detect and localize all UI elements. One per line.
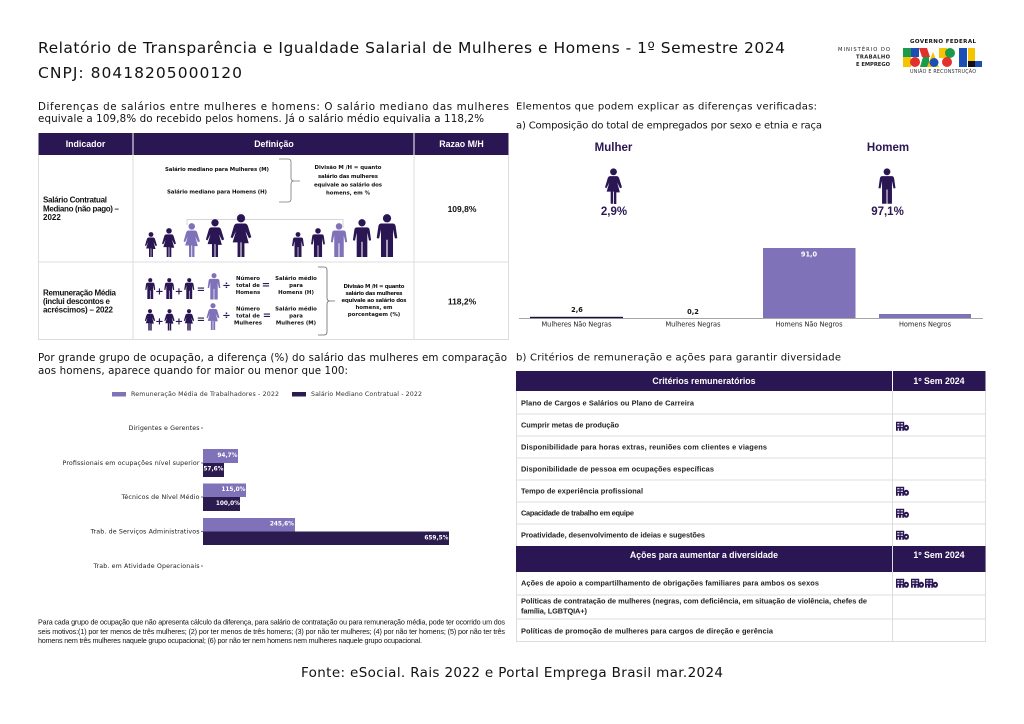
- row label: remuneração média: (inclui descontos e: [43, 297, 111, 306]
- definition: division M/H: [318, 267, 406, 335]
- definition: median salary: Salário mediano para Homens (H): [167, 188, 267, 196]
- panel: man share: [867, 142, 909, 218]
- definition: median salary: salário das mulheres: [318, 173, 378, 180]
- bar chart: occupation: 659,5%: [424, 536, 449, 542]
- footnote: Para cada grupo de ocupação que não apresenta cálculo da diferença, para salário de contratação ou para remuneração média, pode ter ocorrido um dos: [38, 618, 505, 626]
- header: critérios: 1º Sem 2024: [913, 376, 965, 386]
- definition: average pay men: Homens (H): [278, 290, 314, 296]
- definition: division M/H: porcentagem (%): [348, 312, 400, 318]
- bar chart: composition: [519, 248, 983, 328]
- title: [38, 39, 785, 82]
- definition: average pay women: Mulheres: [234, 320, 262, 326]
- text block: salary differences: Diferenças de salários entre mulheres e homens: O salário mediano das mulheres: [38, 101, 509, 113]
- definition: average pay women: =: [263, 310, 271, 322]
- logo: governo federal brasil: UNIÃO E RECONSTRUÇÃO: [910, 68, 976, 75]
- panel: woman share: [595, 142, 633, 218]
- footnote: [38, 618, 505, 645]
- bar chart: occupation: Dirigentes e Gerentes: [128, 425, 200, 432]
- definition: average pay women: [145, 303, 317, 331]
- definition: average pay men: Homens: [236, 290, 260, 296]
- header: ações: Ações para aumentar a diversidade: [630, 550, 778, 560]
- bar chart: occupation: 57,6%: [203, 466, 224, 472]
- definition: average pay men: Número: [236, 275, 260, 282]
- text block: salary differences: [38, 101, 509, 125]
- actions rows: Políticas de promoção de mulheres para cargos de direção e gerência: [521, 626, 774, 636]
- text block: salary differences: equivale a 109,8% do recebido pelos homens. Já o salário médio equivalia a 118,2%: [38, 113, 484, 125]
- row label: remuneração média: Remuneração Média: [43, 288, 117, 298]
- criteria rows: Plano de Cargos e Salários ou Plano de Carreira: [521, 398, 695, 408]
- header: ações: [516, 546, 986, 572]
- logo: ministério do trabalho e emprego: [838, 45, 891, 68]
- value: 118,2%: 118,2%: [448, 296, 477, 306]
- bar chart: composition: Homens Negros: [899, 320, 952, 328]
- definition: division M/H: salário das mulheres: [346, 290, 402, 297]
- header: critérios: Critérios remuneratórios: [652, 376, 756, 386]
- bar chart: composition: Homens Não Negros: [776, 320, 843, 328]
- definition: average pay men: +: [175, 286, 183, 298]
- definition: average pay men: total de: [236, 283, 260, 289]
- definition: median salary: homens, em %: [326, 190, 371, 196]
- definition: median salary: Salário mediano para Mulheres (M): [165, 166, 269, 173]
- definition: average pay women: +: [175, 316, 183, 328]
- table header: Razao M/H: [439, 139, 484, 149]
- legend: Salário Mediano Contratual - 2022: [311, 390, 422, 398]
- title: Relatório de Transparência e Igualdade Salarial de Mulheres e Homens - 1º Semestre 2024: [38, 39, 785, 57]
- header: critérios: [516, 371, 986, 391]
- bar chart: composition: 91,0: [801, 250, 818, 258]
- text block: elements: a) Composição do total de empregados por sexo e etnia e raça: [516, 120, 822, 132]
- bar chart: composition: Mulheres Não Negras: [542, 320, 612, 328]
- icons: median people row: [145, 214, 397, 258]
- text block: elements: Elementos que podem explicar as diferenças verificadas:: [516, 102, 817, 112]
- bar chart: composition: 0,2: [687, 308, 699, 316]
- bar chart: occupation: 94,7%: [217, 453, 238, 459]
- legend: [112, 390, 422, 398]
- definition: division M/H: equivale ao salário dos: [342, 297, 406, 304]
- text block: occupation groups: [38, 352, 507, 377]
- panel: criteria table: [516, 371, 986, 642]
- criteria rows: Cumprir metas de produção: [521, 420, 619, 430]
- bar chart: occupation: 245,6%: [270, 522, 294, 528]
- definition: average pay women: Mulheres (M): [276, 320, 316, 326]
- bar chart: occupation: 115,0%: [221, 487, 246, 493]
- bar chart: occupation: Técnicos de Nível Médio: [120, 493, 200, 501]
- panel: indicator table: [38, 133, 508, 340]
- text block: occupation groups: aos homens, aparece quando for maior ou menor que 100:: [38, 365, 348, 377]
- actions rows: Políticas de contratação de mulheres (negras, com deficiência, em situação de violência, chefes de: [521, 596, 867, 606]
- definition: median salary: [165, 159, 382, 202]
- row label: salário contratual: Mediano (não pago) –: [43, 204, 120, 214]
- panel: man share: 97,1%: [871, 206, 904, 218]
- definition: average pay women: Número: [236, 306, 260, 312]
- text block: occupation groups: Por grande grupo de ocupação, a diferença (%) do salário das mulheres em comparação: [38, 352, 507, 364]
- row label: salário contratual: 2022: [43, 213, 61, 222]
- criteria rows: Proatividade, desenvolvimento de ideias e sugestões: [521, 530, 705, 540]
- definition: average pay men: =: [262, 280, 270, 291]
- definition: median salary: equivale ao salário dos: [314, 182, 382, 188]
- bar chart: occupation: [62, 425, 449, 570]
- definition: average pay men: +: [155, 286, 164, 298]
- row label: salário contratual: [43, 196, 120, 222]
- bar chart: occupation: Trab. de Serviços Administrativos: [90, 528, 200, 536]
- title: CNPJ: 80418205000120: [38, 64, 242, 82]
- criteria rows: Capacidade de trabalho em equipe: [521, 508, 634, 518]
- actions rows: Ações de apoio a compartilhamento de obrigações familiares para ambos os sexos: [521, 578, 819, 588]
- definition: average pay men: ÷: [222, 280, 231, 292]
- row label: remuneração média: acréscimos) – 2022: [43, 306, 114, 314]
- logo: ministério do trabalho e emprego: MINISTÉRIO DO: [838, 45, 890, 53]
- icons: criteria marks: [896, 422, 938, 588]
- legend: Remuneração Média de Trabalhadores - 2022: [131, 390, 279, 398]
- bar chart: occupation: 100,0%: [216, 501, 240, 507]
- heading: criteria: b) Critérios de remuneração e ações para garantir diversidade: [516, 352, 841, 364]
- definition: average pay women: para: [289, 314, 303, 320]
- definition: average pay women: Salário médio: [275, 306, 317, 312]
- footnote: homens nem três mulheres naquele grupo ocupacional; (6) por não ter nem homens nem mulheres naquele grupo ocupacional.: [38, 636, 422, 645]
- header: ações: 1º Sem 2024: [913, 550, 965, 560]
- criteria rows: Disponibilidade de pessoa em ocupações específicas: [521, 464, 714, 474]
- definition: average pay men: [145, 273, 317, 300]
- definition: median salary: Divisão M /H = quanto: [314, 165, 382, 171]
- row label: salário contratual: Salário Contratual: [43, 196, 107, 204]
- bar chart: composition: 2,6: [571, 306, 583, 314]
- value: 109,8%: 109,8%: [448, 204, 477, 214]
- logo: ministério do trabalho e emprego: E EMPREGO: [856, 62, 891, 68]
- logo: ministério do trabalho e emprego: TRABALHO: [856, 54, 891, 60]
- panel: woman share: Mulher: [595, 142, 633, 154]
- definition: average pay men: para: [289, 283, 303, 289]
- definition: division M/H: homens, em: [355, 305, 393, 311]
- definition: average pay men: =: [197, 284, 205, 296]
- bar chart: occupation: Profissionais em ocupações nível superior: [62, 459, 200, 467]
- criteria rows: Tempo de experiência profissional: [521, 486, 643, 496]
- criteria rows: Disponibilidade para horas extras, reuniões com clientes e viagens: [521, 442, 767, 452]
- logo: governo federal brasil: [903, 39, 982, 75]
- text block: elements: [516, 102, 822, 132]
- table header: Indicador: [66, 139, 106, 149]
- definition: average pay men: Salário médio: [275, 275, 317, 282]
- definition: average pay women: +: [155, 316, 164, 328]
- definition: average pay women: total de: [236, 314, 260, 320]
- row label: remuneração média: [43, 288, 117, 314]
- source: Fonte: eSocial. Rais 2022 e Portal Emprega Brasil mar.2024: [301, 665, 723, 681]
- table header: [38, 133, 508, 155]
- panel: man share: Homem: [867, 142, 909, 154]
- table header: Definição: [254, 139, 294, 149]
- footnote: seis motivos:(1) por ter menos de três mulheres; (2) por ter menos de três homens; (3) por não ter mulheres; (4) por não ter homens; (5) por não ter três: [38, 627, 505, 636]
- panel: woman share: 2,9%: [601, 206, 627, 218]
- definition: average pay women: =: [197, 314, 205, 326]
- actions rows: [521, 578, 867, 636]
- bar chart: composition: Mulheres Negras: [666, 320, 721, 328]
- criteria rows: [521, 398, 767, 540]
- definition: average pay women: ÷: [222, 310, 231, 322]
- definition: division M/H: Divisão M /H = quanto: [344, 284, 405, 290]
- bar chart: occupation: Trab. em Atividade Operacionais: [92, 563, 200, 570]
- logo: governo federal brasil: GOVERNO FEDERAL: [910, 39, 976, 45]
- actions rows: família, LGBTQIA+): [521, 606, 588, 616]
